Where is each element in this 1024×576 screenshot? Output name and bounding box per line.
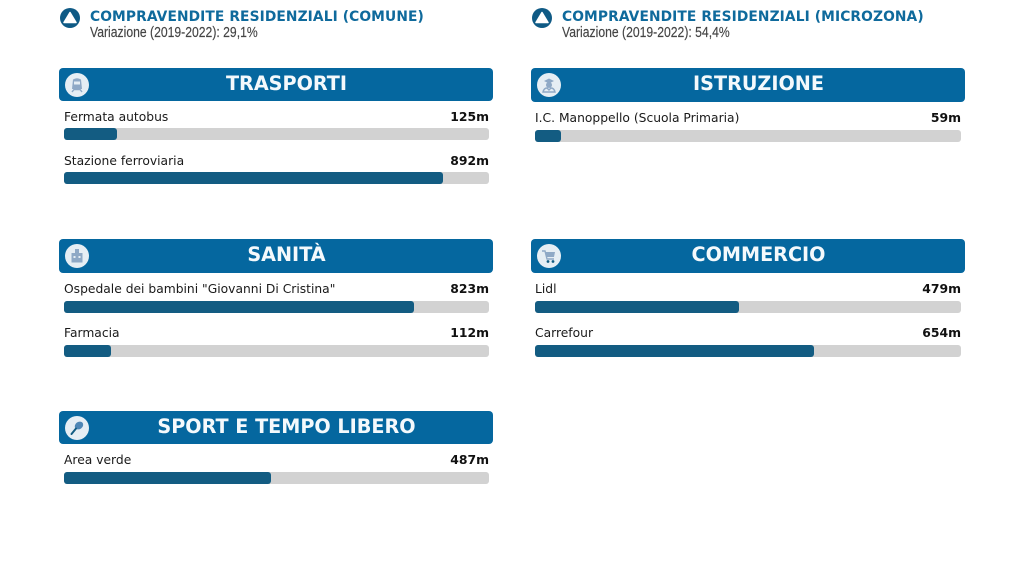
row: stazione ferroviaria: Stazione ferroviaria [64, 154, 184, 168]
row: lidl: 479m [922, 281, 961, 296]
row: stazione ferroviaria [64, 153, 489, 184]
panel: trasporti [59, 68, 493, 184]
header: sport: SPORT E TEMPO LIBERO [157, 414, 416, 438]
row: ospedale: 823m [450, 281, 489, 296]
panel: istruzione [531, 68, 965, 142]
heading: comune: COMPRAVENDITE RESIDENZIALI (COMUNE) [90, 9, 424, 25]
subtitle: comune: Variazione (2019-2022): 29,1% [90, 25, 258, 41]
row: carrefour [535, 325, 961, 357]
header: sanità [59, 239, 493, 273]
row: fermata autobus [64, 109, 489, 140]
row: fermata autobus: 125m [450, 109, 489, 124]
icon: triangle microzona [532, 8, 552, 28]
row: ospedale [64, 281, 489, 313]
header: commercio [531, 239, 965, 273]
icon: train [65, 72, 89, 96]
row: ospedale: Ospedale dei bambini "Giovanni Di Cristina" [64, 282, 335, 296]
header: trasporti [59, 68, 493, 100]
row: scuola primaria: I.C. Manoppello (Scuola Primaria) [535, 111, 739, 125]
panel: commercio [531, 239, 965, 357]
header: istruzione [531, 68, 965, 102]
heading: microzona: COMPRAVENDITE RESIDENZIALI (MICROZONA) [562, 9, 924, 25]
header: trasporti: TRASPORTI [226, 72, 347, 95]
row: stazione ferroviaria: 892m [450, 153, 489, 168]
row: carrefour: 654m [922, 325, 961, 340]
row: fermata autobus: Fermata autobus [64, 110, 168, 124]
row: farmacia [64, 325, 489, 357]
icon: racket [65, 416, 89, 440]
header: commercio: COMMERCIO [692, 243, 826, 266]
subtitle: microzona: Variazione (2019-2022): 54,4% [562, 25, 730, 41]
icon: cart [537, 244, 561, 268]
icon: hospital [65, 244, 89, 268]
row: scuola primaria: 59m [931, 110, 961, 125]
row: lidl [535, 281, 961, 313]
row: scuola primaria [535, 110, 961, 142]
panel: sport e tempo libero [59, 411, 493, 484]
row: farmacia: Farmacia [64, 326, 120, 340]
row: lidl: Lidl [535, 282, 556, 296]
row: area verde [64, 452, 489, 484]
row: area verde: Area verde [64, 453, 131, 467]
row: farmacia: 112m [450, 325, 489, 340]
header: istruzione: ISTRUZIONE [693, 72, 824, 95]
icon: student [537, 73, 561, 97]
header: sport [59, 411, 493, 444]
header: sanità: SANITÀ [247, 243, 326, 266]
row: area verde: 487m [450, 452, 489, 467]
row: carrefour: Carrefour [535, 326, 593, 340]
icon: triangle comune [60, 8, 80, 28]
panel: sanità [59, 239, 493, 357]
